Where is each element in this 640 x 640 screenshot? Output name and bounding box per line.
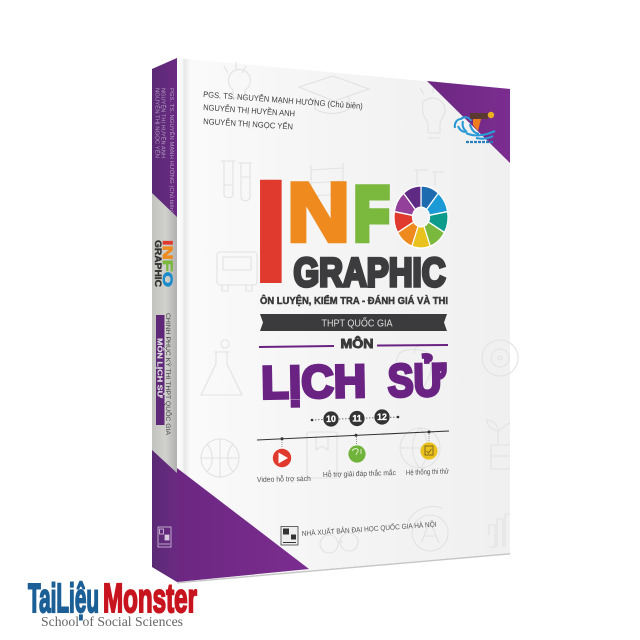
author names: [203, 88, 363, 131]
spine author names: NGUYỄN THỊ HUYỀN ANH: [160, 88, 166, 158]
icon: test tubes right: [414, 170, 444, 186]
book spine: [152, 58, 177, 582]
banner THPT Quốc Gia: THPT QUỐC GIA: [322, 316, 393, 330]
book front cover: [177, 58, 510, 582]
icon: apple: [396, 344, 431, 386]
letter I: I: [250, 147, 292, 315]
feature labels: [257, 467, 449, 484]
icon: graduation cap: [299, 76, 369, 114]
publisher name: NHÀ XUẤT BẢN ĐẠI HỌC QUỐC GIA HÀ NỘI: [301, 519, 437, 538]
icon: light bulb left: [224, 62, 250, 98]
grade selector 10 11 12: [311, 409, 399, 427]
icon: potted plant: [487, 420, 510, 469]
heading MÔN with rules: MÔN: [340, 336, 374, 351]
watermark Monster: Monster: [103, 575, 197, 621]
purple corner bottom left: [177, 468, 309, 582]
author names: NGUYỄN THỊ NGỌC YẾN: [203, 115, 293, 131]
subtitle line: ÔN LUYỆN, KIỂM TRA - ĐÁNH GIÁ VÀ THI: [260, 294, 448, 307]
title INFO: [250, 147, 448, 315]
icon: target: [482, 340, 518, 376]
spine author names: NGUYỄN THỊ NGỌC YẾN: [154, 88, 160, 158]
letter N: N: [287, 166, 350, 260]
watermark tagline: School of Social Sciences: [41, 614, 183, 629]
letter F: F: [354, 173, 389, 255]
icon: school bus: [217, 252, 257, 291]
spine author names: PGS. TS. NGUYỄN MẠNH HƯỜNG (Chủ biên): [168, 88, 175, 213]
title GRAPHIC: GRAPHIC: [294, 251, 446, 295]
spine publisher logo: [158, 527, 171, 547]
icon: test tubes left: [221, 161, 252, 201]
purple corner top right: [427, 81, 510, 163]
author names: NGUYỄN THỊ HUYỀN ANH: [203, 101, 295, 118]
icon: light bulb right: [420, 85, 445, 138]
icon: abacus: [311, 163, 343, 207]
icon: basketball: [201, 439, 239, 477]
icon: letter A circle: [408, 507, 448, 551]
spine INFO title: I N F O: [160, 240, 176, 287]
heading LỊCH SỬ: [261, 353, 447, 408]
spine author names: [154, 88, 175, 213]
publisher brand logo top right: [455, 112, 495, 142]
publisher logo: [281, 526, 298, 545]
feature labels: Hệ thống thi thử: [406, 467, 449, 477]
author names: PGS. TS. NGUYỄN MẠNH HƯỜNG (Chủ biên): [203, 88, 363, 111]
spine subject label: [156, 315, 164, 425]
icon: test system: [420, 442, 438, 460]
grade selector 10 11 12: 12: [377, 412, 387, 422]
heading LỊCH SỬ: SỬ: [387, 353, 447, 406]
book bottom edge: [177, 553, 510, 584]
grade selector 10 11 12: 11: [352, 414, 362, 424]
feature labels: Hỗ trợ giải đáp thắc mắc: [323, 468, 396, 479]
icon: support question: [348, 445, 366, 463]
icon: bookmark tablet: [307, 432, 337, 478]
banner THPT Quốc Gia: [260, 314, 447, 331]
heading LỊCH SỬ: LỊCH: [261, 355, 367, 408]
icon: video play: [273, 449, 291, 467]
timeline: [257, 430, 449, 448]
spine subtitle: CHINH PHỤC KỲ THI THPT QUỐC GIA: [164, 313, 171, 435]
grade selector 10 11 12: 10: [326, 414, 336, 424]
letter O colour wheel: [394, 186, 448, 248]
icon: flask: [201, 340, 242, 395]
icon: glasses: [320, 533, 358, 553]
icon: globe: [400, 428, 440, 468]
watermark logo: [28, 575, 197, 629]
faint background icons: [201, 62, 518, 553]
icon: bar chart: [489, 514, 510, 547]
watermark TaiLiệu: TaiLiệu: [28, 575, 99, 621]
spine GRAPHIC title: GRAPHIC: [152, 240, 163, 287]
spine subject label: MÔN LỊCH SỬ: [156, 338, 164, 398]
feature labels: Video hỗ trợ sách: [257, 474, 311, 484]
